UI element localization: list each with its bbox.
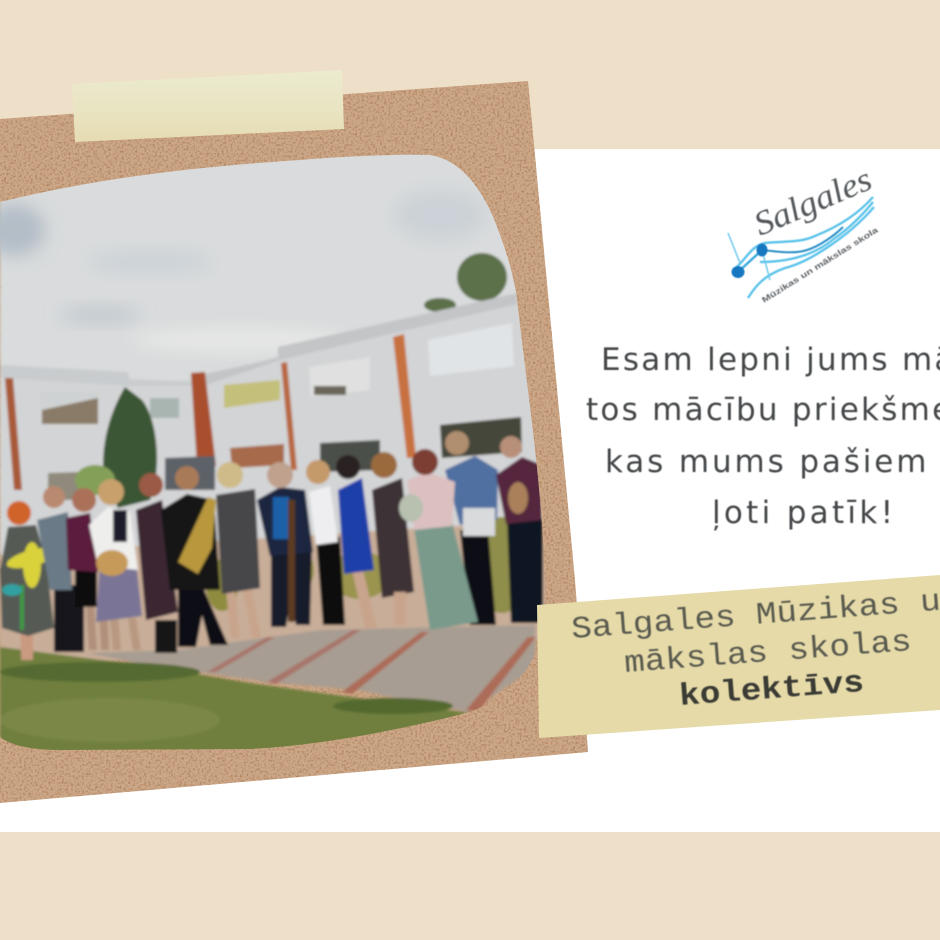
person 4 (89, 479, 142, 650)
caption text: kolektīvs (678, 666, 865, 715)
person 3 (66, 488, 109, 650)
logo music staff (728, 197, 874, 298)
person 8 bassoon player (257, 462, 313, 627)
person 13 (445, 431, 498, 625)
person 12 (399, 449, 478, 630)
person 6 saxophone player (161, 466, 228, 647)
main message text: ļoti patīk! (712, 495, 893, 531)
person 5 (136, 473, 178, 653)
photo path and hedges (0, 517, 550, 665)
paper caption banner (537, 575, 940, 738)
photo distant tree (424, 253, 507, 312)
white card panel (0, 149, 940, 832)
photo building (0, 293, 542, 556)
logo subtitle: Mūzikas un mākslas skola (760, 225, 880, 305)
photo grass (0, 647, 470, 760)
main message text (586, 342, 940, 531)
group photo (0, 150, 550, 760)
person 1 (0, 501, 59, 660)
person 14 (496, 436, 543, 623)
caption text: mākslas skolas (623, 625, 913, 682)
person 7 (216, 462, 261, 638)
school logo (728, 161, 880, 305)
person 9 (306, 460, 345, 625)
photo pavement (86, 625, 536, 712)
caption text (570, 583, 940, 715)
person 10 (336, 455, 377, 628)
logo notes (732, 244, 768, 278)
caption text: Salgales Mūzikas un (570, 583, 940, 648)
masking tape (72, 70, 344, 142)
person 2 (37, 486, 84, 652)
person 11 (371, 452, 414, 625)
photo cypress tree (75, 387, 157, 508)
cork paper frame (0, 81, 588, 803)
photo sky (0, 154, 518, 382)
logo name: Salgales (749, 161, 877, 243)
